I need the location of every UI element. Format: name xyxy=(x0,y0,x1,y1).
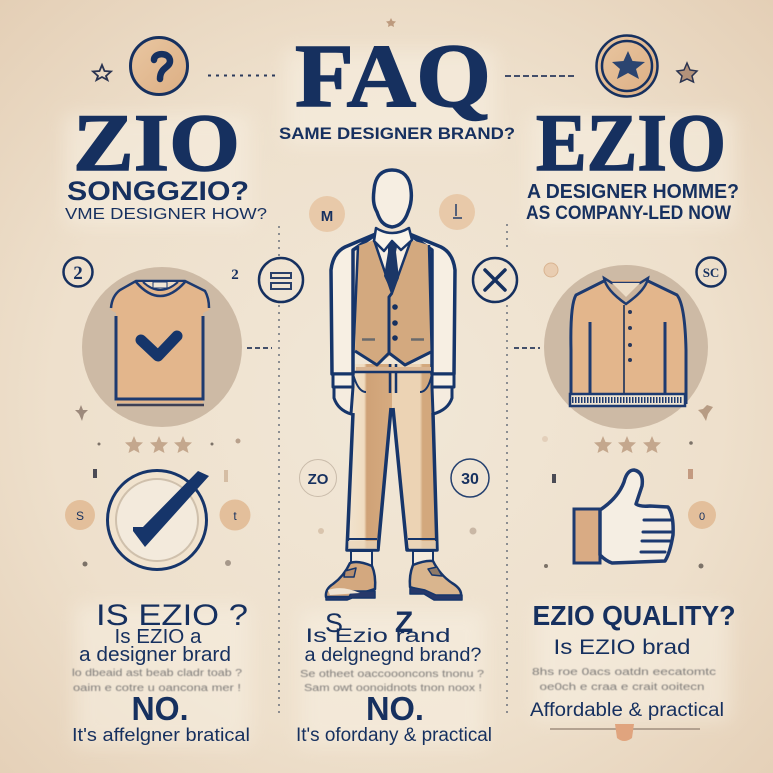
dashed connectors to garments xyxy=(247,347,540,349)
badge: tan circle right: t xyxy=(233,509,237,523)
text block: right FAQ xyxy=(530,600,736,721)
text block: left FAQ: a designer brard xyxy=(79,644,231,666)
heading: EZIO column: AS COMPANY-LED NOW xyxy=(526,203,731,224)
badge: 30: 30 xyxy=(461,471,479,488)
badge: number 2 circle xyxy=(64,258,92,286)
text block: middle FAQ: It's ofordany & practical xyxy=(296,725,492,746)
badge: number 2 circle: 2 xyxy=(73,263,83,284)
text block: right FAQ: EZIO QUALITY? xyxy=(532,600,736,631)
icon: sweater with checkmark xyxy=(82,267,242,427)
badge: 30 xyxy=(451,459,489,497)
text block: right FAQ: oe0ch e craa e crait ooitecn xyxy=(540,682,704,693)
icon: check circle xyxy=(108,470,209,570)
text block: left FAQ: IS EZIO ? xyxy=(96,599,248,632)
heading: ZIO column xyxy=(65,97,267,223)
text block: middle FAQ: Sam owt oonoidnots tnon noox ! xyxy=(304,683,482,694)
badge: hanger glyph xyxy=(439,194,475,230)
text block: right FAQ: Affordable & practical xyxy=(530,700,724,721)
badge: SC circle: SC xyxy=(703,265,719,280)
badge: tan circle left xyxy=(65,500,95,530)
trousers xyxy=(347,364,437,550)
stars row right xyxy=(594,436,661,453)
dotted column dividers xyxy=(279,224,507,718)
icon: thumbs up xyxy=(574,470,673,563)
text block: left FAQ: It's affelgner bratical xyxy=(72,725,250,745)
tie xyxy=(384,242,399,293)
head xyxy=(373,170,411,227)
badge: SC circle xyxy=(696,258,726,286)
icon: outlined star left xyxy=(93,65,111,80)
badge: cross circle xyxy=(473,258,517,302)
stars row left xyxy=(125,436,192,453)
heading: ZIO column: ZIO xyxy=(73,97,240,188)
text block: middle FAQ: Se otheet oaccoooncons tnonu ? xyxy=(300,669,485,680)
label: number 2: 2 xyxy=(231,267,239,283)
left shoe xyxy=(326,562,375,600)
heading: EZIO column: A DESIGNER HOMME? xyxy=(527,181,739,203)
cuffs xyxy=(333,374,454,387)
text block: middle FAQ: S xyxy=(325,608,343,638)
badge: ZO: ZO xyxy=(308,471,329,488)
heading: EZIO column xyxy=(526,97,739,224)
subtitle: same designer brand: SAME DESIGNER BRAND? xyxy=(279,124,515,143)
text block: left FAQ xyxy=(72,599,250,745)
icon: question mark circle xyxy=(130,38,188,94)
collar xyxy=(374,228,412,251)
right shoe xyxy=(410,561,462,600)
icon: tiny star top xyxy=(386,18,396,27)
badge: shirt circle xyxy=(259,258,303,302)
hands xyxy=(334,387,452,414)
text block: middle FAQ: a delgnegnd brand? xyxy=(304,645,482,666)
text block: middle FAQ: Z xyxy=(395,606,413,639)
vest xyxy=(353,240,432,372)
shirt sleeves and torso xyxy=(331,233,455,374)
icon: cardigan xyxy=(544,265,708,429)
badge: tan circle left: S xyxy=(76,509,84,523)
text block: middle FAQ: Is Ezio rand xyxy=(306,626,450,647)
text block: right FAQ: Is EZIO brad xyxy=(554,636,690,659)
badge: tan circle thumbs: 0 xyxy=(699,511,705,523)
text block: middle FAQ: NO. xyxy=(366,690,424,727)
text block: middle FAQ xyxy=(296,606,492,746)
heading: ZIO column: VME DESIGNER HOW? xyxy=(65,206,267,223)
text block: left FAQ: Is EZIO a xyxy=(114,626,202,648)
decorative small marks xyxy=(75,405,713,568)
footer ornament xyxy=(550,724,700,741)
socks xyxy=(351,551,433,567)
dotted connector left xyxy=(208,74,279,76)
badge: M: M xyxy=(321,208,333,225)
badge: tan circle right xyxy=(220,500,250,530)
heading: EZIO column: EZIO xyxy=(536,97,726,188)
badge: tan circle thumbs xyxy=(688,501,716,529)
badge: ZO xyxy=(300,460,336,496)
text block: right FAQ: 8hs roe 0acs oatdn eecatomtc xyxy=(532,667,716,678)
small tan blob xyxy=(544,263,558,277)
heading: ZIO column: SONGGZIO? xyxy=(67,176,249,206)
dashed connector right xyxy=(505,75,575,77)
title: FAQ: FAQ xyxy=(295,27,491,126)
text block: left FAQ: oaim e cotre u oancona mer ! xyxy=(73,683,241,694)
icon: star badge xyxy=(596,36,658,96)
badge: M xyxy=(309,196,345,232)
icon: small star right xyxy=(677,63,697,82)
figure: man in vest xyxy=(326,170,462,600)
text block: left FAQ: NO. xyxy=(132,690,188,727)
text block: left FAQ: lo dbeaid ast beab cladr toab ? xyxy=(72,668,243,679)
